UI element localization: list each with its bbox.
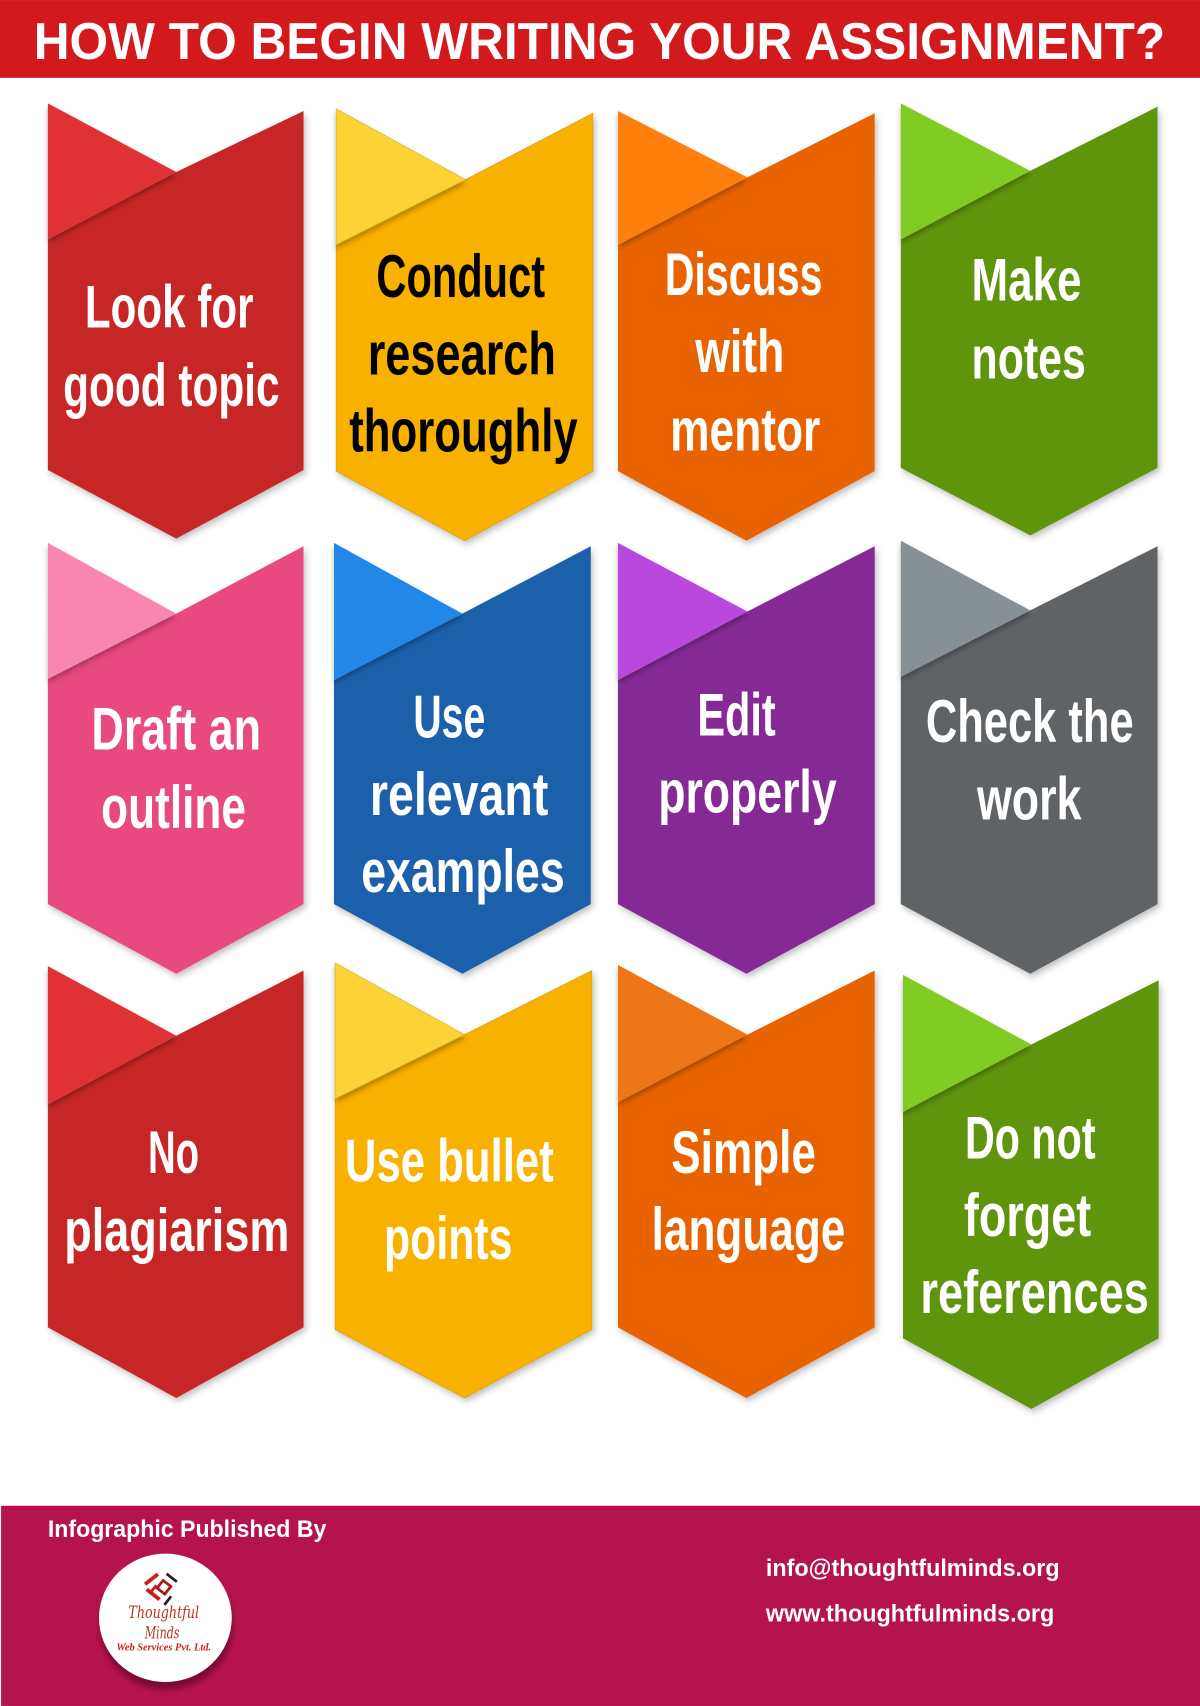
card: Conduct research thoroughly [336, 109, 593, 541]
card: Look for good topic: good topic [63, 352, 280, 419]
card: Use relevant examples: examples [361, 838, 565, 905]
card: Simple language: language [652, 1196, 845, 1263]
card: Conduct research thoroughly: Conduct [376, 243, 545, 310]
footer panel [1, 1506, 1200, 1706]
card: Edit properly: Edit [697, 682, 776, 749]
card: Discuss with mentor: Discuss [665, 241, 822, 308]
card: Use bullet points: points [384, 1205, 512, 1272]
card: No plagiarism: No [148, 1119, 199, 1186]
card: Discuss with mentor [618, 111, 875, 541]
card: Use bullet points: Use bullet [345, 1128, 554, 1195]
card: Look for good topic [48, 103, 304, 539]
card: Use relevant examples: Use [413, 684, 485, 751]
title banner [0, 0, 1200, 78]
card: Discuss with mentor: mentor [670, 396, 820, 463]
card: Draft an outline: outline [101, 774, 246, 841]
card: Make notes: notes [972, 325, 1086, 392]
card: Do not forget references [903, 975, 1159, 1409]
card: Conduct research thoroughly: research [368, 320, 556, 387]
card: Check the work [901, 541, 1158, 974]
card: Conduct research thoroughly: thoroughly [349, 398, 578, 465]
card: Use relevant examples: relevant [370, 761, 548, 828]
card: Check the work: work [976, 765, 1082, 832]
logo badge: Minds [144, 1623, 180, 1642]
card: No plagiarism [48, 966, 304, 1398]
card: Draft an outline: Draft an [91, 696, 261, 763]
publisher heading: Infographic Published By [48, 1516, 327, 1543]
card: Do not forget references: Do not [965, 1105, 1096, 1172]
contact website: www.thoughtfulminds.org [765, 1601, 1054, 1628]
card: Do not forget references: forget [964, 1182, 1091, 1249]
logo badge [99, 1554, 232, 1682]
card: Look for good topic: Look for [85, 274, 253, 341]
card: Use relevant examples [334, 543, 591, 974]
card: Discuss with mentor: with [694, 318, 784, 385]
logo wordmark: Thoughtful [128, 1603, 199, 1622]
card: Draft an outline [48, 543, 304, 974]
title: HOW TO BEGIN WRITING YOUR ASSIGNMENT? [34, 13, 1165, 71]
icon: logo mark [144, 1573, 178, 1606]
card: No plagiarism: plagiarism [64, 1197, 289, 1264]
logo badge: Web Services Pvt. Ltd. [116, 1642, 211, 1653]
card: Edit properly [618, 543, 875, 974]
card: Edit properly: properly [658, 759, 837, 826]
card: Simple language [618, 965, 875, 1398]
card: Use bullet points [335, 963, 592, 1398]
contact email: info@thoughtfulminds.org [766, 1555, 1060, 1582]
card: Make notes: Make [972, 246, 1081, 313]
card: Simple language: Simple [671, 1119, 816, 1186]
card: Make notes [901, 103, 1158, 535]
